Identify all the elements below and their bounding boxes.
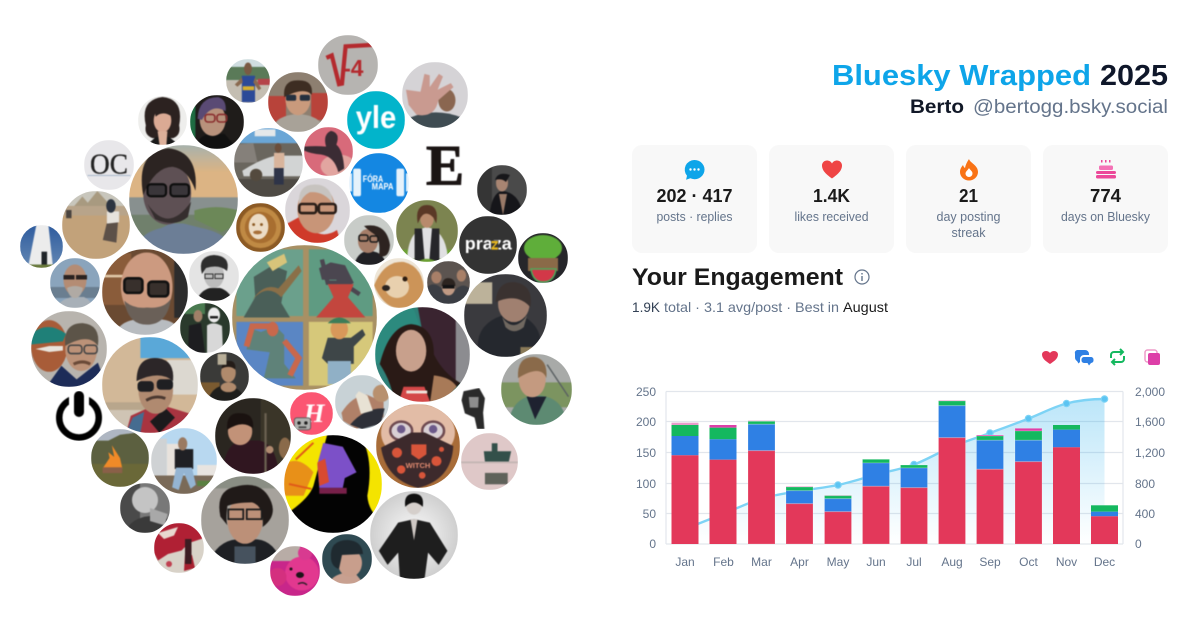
avatar: man in sunglasses before cathedral xyxy=(102,337,198,433)
avatar: white-haired man in red jacket xyxy=(285,178,350,243)
avatar: man in dark beanie xyxy=(322,534,372,584)
bar: February xyxy=(710,425,736,544)
month labels: Jul xyxy=(906,555,922,569)
right axis labels xyxy=(1135,385,1165,551)
icon: birthday cake xyxy=(1096,160,1116,178)
avatar: bald man with grey goatee xyxy=(50,258,100,308)
stat card: likes received xyxy=(769,145,894,253)
month labels: Jan xyxy=(675,555,695,569)
right panel xyxy=(620,50,1180,580)
stat card: day posting streak xyxy=(906,145,1031,253)
bar: October xyxy=(1015,428,1042,544)
avatar: pink gothic letter logo with robot badge: H xyxy=(303,398,326,428)
month labels xyxy=(675,555,1115,569)
icon: flame xyxy=(960,159,978,180)
bar: December xyxy=(1091,505,1118,544)
user name and handle: @bertogg.bsky.social xyxy=(973,97,1168,118)
avatar: woman in witch face mask xyxy=(376,404,460,488)
chart gridlines xyxy=(666,392,1123,544)
engagement summary xyxy=(632,299,888,315)
engagement summary: 1.9K xyxy=(632,299,661,315)
avatar: curly-haired man with glasses xyxy=(201,476,289,564)
engagement summary: total · 3.1 avg/post · Best in xyxy=(664,299,839,315)
avatar: Fóra Mapa podcast logo: MAPA xyxy=(372,182,394,192)
avatar: cat and dogs with man xyxy=(335,375,389,429)
avatar: black and white woman in dark dress xyxy=(370,491,458,579)
stat card: day posting streak: 21 xyxy=(959,186,978,206)
avatar: man with stormtrooper xyxy=(180,303,230,353)
left axis labels: 250 xyxy=(636,385,656,399)
avatar: curly-haired woman smiling xyxy=(138,96,187,144)
left axis labels: 150 xyxy=(636,446,656,460)
avatar: lettuce and watermelon xyxy=(518,233,568,283)
month labels: Nov xyxy=(1056,555,1077,569)
stat card: day posting streak: streak xyxy=(952,226,986,240)
avatar: golden dog xyxy=(374,258,424,308)
avatar cloud xyxy=(20,35,572,596)
avatar: yellow and black profile portrait xyxy=(284,435,382,533)
engagement chart xyxy=(636,385,1165,569)
cumulative line with points xyxy=(685,396,1108,529)
avatar: man with mural xyxy=(31,311,107,387)
month labels: Apr xyxy=(790,555,809,569)
avatar: ship on pink water xyxy=(461,433,518,490)
avatar: Fóra Mapa podcast logo: FÓRA xyxy=(363,173,384,184)
legend icons xyxy=(1042,349,1160,366)
avatar: OC logo: OC xyxy=(90,148,128,180)
left axis labels: 0 xyxy=(649,537,656,551)
month labels: Feb xyxy=(713,555,734,569)
icon: speech bubble xyxy=(685,160,705,180)
icon: reposts legend arrows xyxy=(1111,349,1124,365)
stat card: posts and replies: 202 · 417 xyxy=(656,186,732,206)
avatar: woman in witch face mask: WITCH xyxy=(406,461,430,470)
avatar: man beside white car xyxy=(234,128,302,197)
icon: info xyxy=(855,270,869,284)
right axis labels: 1,600 xyxy=(1135,415,1165,429)
title: Bluesky Wrapped xyxy=(832,60,1091,92)
bar: June xyxy=(862,459,890,544)
stat card: days on Bluesky xyxy=(1043,145,1168,253)
avatar: pink teddy bear xyxy=(270,546,320,596)
avatar: OC logo xyxy=(84,140,134,190)
user name and handle xyxy=(910,97,1168,118)
avatar: E logo: E xyxy=(426,134,464,197)
icon: quotes legend squares xyxy=(1145,350,1160,365)
bar: March xyxy=(748,420,775,544)
bar: April xyxy=(786,486,813,544)
stat card: posts and replies: posts · replies xyxy=(656,210,732,224)
avatar: white lighthouse xyxy=(20,225,63,268)
right axis labels: 800 xyxy=(1135,477,1155,491)
avatar: man sitting on wall xyxy=(151,428,217,494)
avatar: child in dark robe xyxy=(215,398,291,474)
month labels: May xyxy=(827,555,849,569)
avatar: group of friends xyxy=(427,261,470,304)
avatar: yle logo: yle xyxy=(355,100,396,135)
avatar: man in green jacket xyxy=(501,354,572,425)
bar: September xyxy=(976,435,1004,544)
bar: July xyxy=(900,465,928,544)
left axis labels: 50 xyxy=(643,507,656,521)
avatar: bald man with black glasses xyxy=(102,249,188,335)
month labels: Mar xyxy=(751,555,772,569)
user name and handle: Berto xyxy=(910,97,964,118)
avatar: painting with four panels xyxy=(232,245,377,390)
right axis labels: 400 xyxy=(1135,507,1155,521)
left axis labels: 200 xyxy=(636,415,656,429)
avatar: pink photo with dark hair xyxy=(304,127,353,176)
right axis labels: 1,200 xyxy=(1135,446,1165,460)
title: 2025 xyxy=(1100,60,1168,92)
icon: replies legend bubbles xyxy=(1075,350,1094,366)
avatar: greyscale man with child xyxy=(120,483,170,533)
bar: November xyxy=(1053,425,1080,544)
avatar: purple-haired woman with red glasses xyxy=(190,95,244,149)
avatar: Fóra Mapa podcast logo xyxy=(349,153,409,213)
avatar: pink gothic letter logo with robot badge xyxy=(290,392,333,435)
stat card: likes received: 1.4K xyxy=(813,186,850,206)
avatar: runner in blue jersey xyxy=(226,59,270,103)
stat card: day posting streak: day posting xyxy=(936,210,1001,224)
avatar: man at laptop xyxy=(464,274,547,357)
avatar: latte art coffee xyxy=(236,203,285,252)
engagement summary: August xyxy=(843,299,888,315)
avatar: man with hand on chin xyxy=(200,352,249,401)
avatar: woman in black blazer xyxy=(477,165,527,215)
stat card: days on Bluesky: days on Bluesky xyxy=(1061,210,1151,224)
avatar: power symbol xyxy=(55,391,103,441)
avatar: praza logo: praza xyxy=(465,233,513,253)
bar: August xyxy=(938,400,966,544)
avatar: bonfire in field xyxy=(91,429,149,487)
month labels: Aug xyxy=(941,555,963,569)
cumulative area xyxy=(685,399,1104,544)
bar: May xyxy=(824,495,852,544)
stacked bars by month xyxy=(672,400,1118,544)
month labels: Oct xyxy=(1019,555,1038,569)
icon: heart xyxy=(822,160,842,178)
avatar: praza logo xyxy=(459,216,517,274)
avatar: ink sketch of head xyxy=(461,388,486,429)
avatar: woman with glasses xyxy=(344,215,394,265)
avatar: man by red seat xyxy=(268,72,328,132)
month labels: Jun xyxy=(866,555,886,569)
stat card: posts and replies xyxy=(632,145,757,253)
avatar: red paint on white xyxy=(154,523,204,573)
stat card: days on Bluesky: 774 xyxy=(1090,186,1121,206)
avatar: black and white young man xyxy=(188,251,238,301)
avatar: yle logo xyxy=(347,91,405,149)
section heading: Your Engagement: Your Engagement xyxy=(632,264,843,291)
avatar: hand over face xyxy=(402,62,468,128)
avatar: square root of minus four xyxy=(318,35,378,95)
month labels: Sep xyxy=(979,555,1001,569)
left axis labels: 100 xyxy=(636,477,656,491)
stat card: likes received: likes received xyxy=(794,210,869,224)
avatar: woman before pyramids xyxy=(62,191,130,259)
avatar: man at sunset by the sea xyxy=(129,145,238,254)
month labels: Dec xyxy=(1094,555,1115,569)
icon: likes legend heart xyxy=(1042,351,1058,364)
right axis labels: 0 xyxy=(1135,537,1142,551)
avatar: square root of minus four: -4 xyxy=(343,55,364,81)
left axis labels xyxy=(636,385,656,551)
avatar: woman in black vest xyxy=(396,200,458,262)
right axis labels: 2,000 xyxy=(1135,385,1165,399)
avatar: dark-haired woman on striped blanket xyxy=(375,307,470,402)
bar: January xyxy=(672,423,698,544)
